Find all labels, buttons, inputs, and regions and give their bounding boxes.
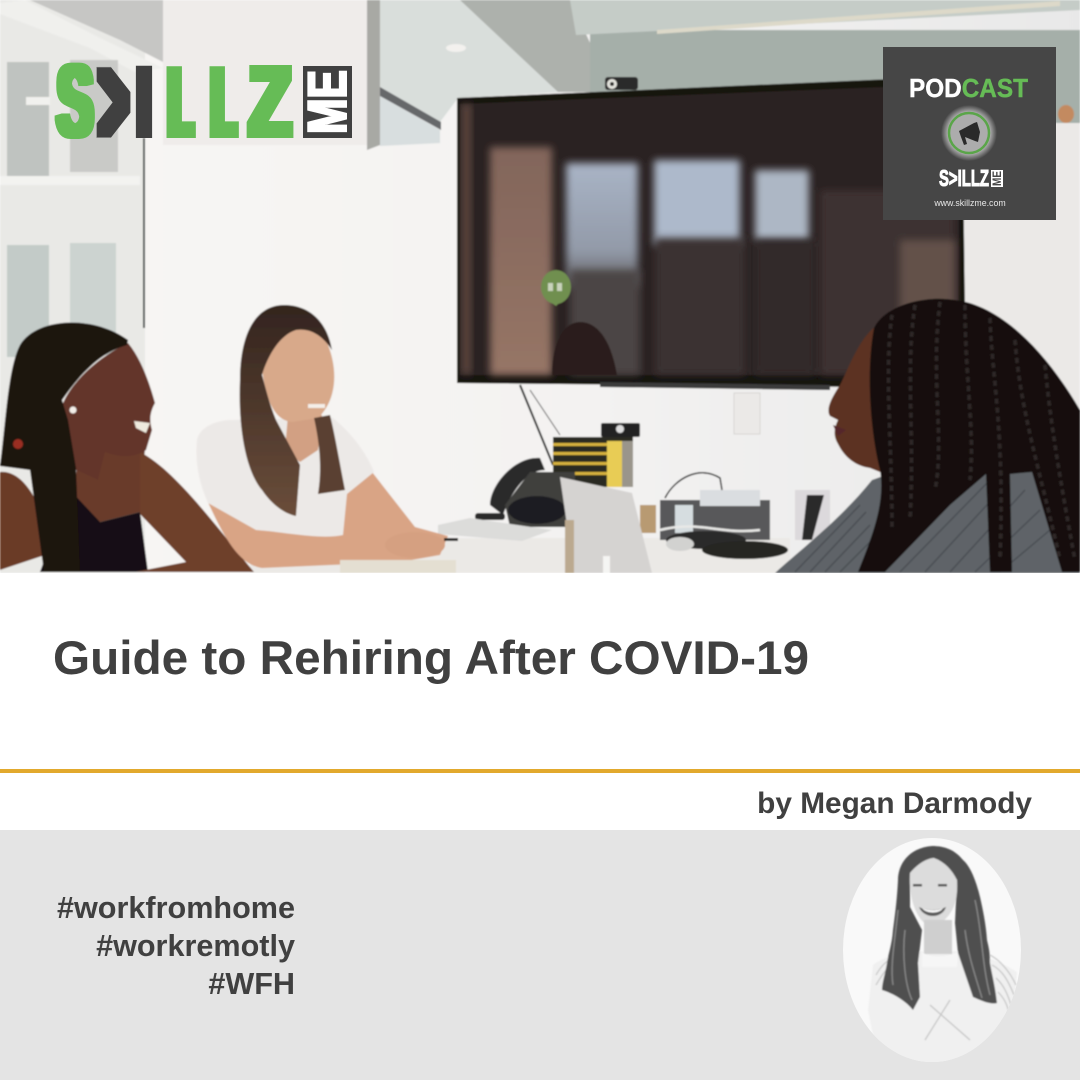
person: woman on the left: [0, 322, 254, 572]
room walls and ceiling: [0, 0, 1080, 573]
hashtags: [57, 891, 295, 1001]
panel: hero photo of a meeting: [0, 0, 1080, 573]
desk with equipment: [250, 385, 830, 573]
panel: grey footer: [0, 830, 1080, 1080]
podcast heading: PODCAST: [909, 73, 1028, 103]
logo: SKILLZ ME: [54, 50, 358, 150]
stack of books: [553, 423, 640, 487]
website: www.skillzme.com: [933, 198, 1006, 208]
icon: megaphone: [941, 105, 997, 161]
person: woman on the right: [775, 299, 1080, 573]
wall mounted TV: [457, 76, 966, 390]
desk phone: [475, 458, 575, 527]
gold divider: [0, 769, 1080, 773]
mini logo: ME: [990, 171, 1004, 186]
mini logo: S>ILLZ: [939, 165, 989, 191]
hashtags: #workfromhome: [57, 891, 295, 925]
ceiling right: [460, 0, 592, 92]
glass opening: [380, 0, 560, 122]
keyboard: [438, 518, 552, 541]
person: woman in the middle: [196, 305, 458, 573]
title: Guide to Rehiring After COVID-19: [53, 632, 809, 685]
hashtags: #WFH: [208, 967, 295, 1001]
author portrait: [843, 838, 1021, 1062]
podcast badge: [883, 47, 1056, 220]
logo: SKILLZ ME: ME: [296, 70, 358, 134]
hashtags: #workremotly: [96, 929, 295, 963]
laptop: [560, 477, 652, 573]
byline: by Megan Darmody: [757, 787, 1032, 820]
